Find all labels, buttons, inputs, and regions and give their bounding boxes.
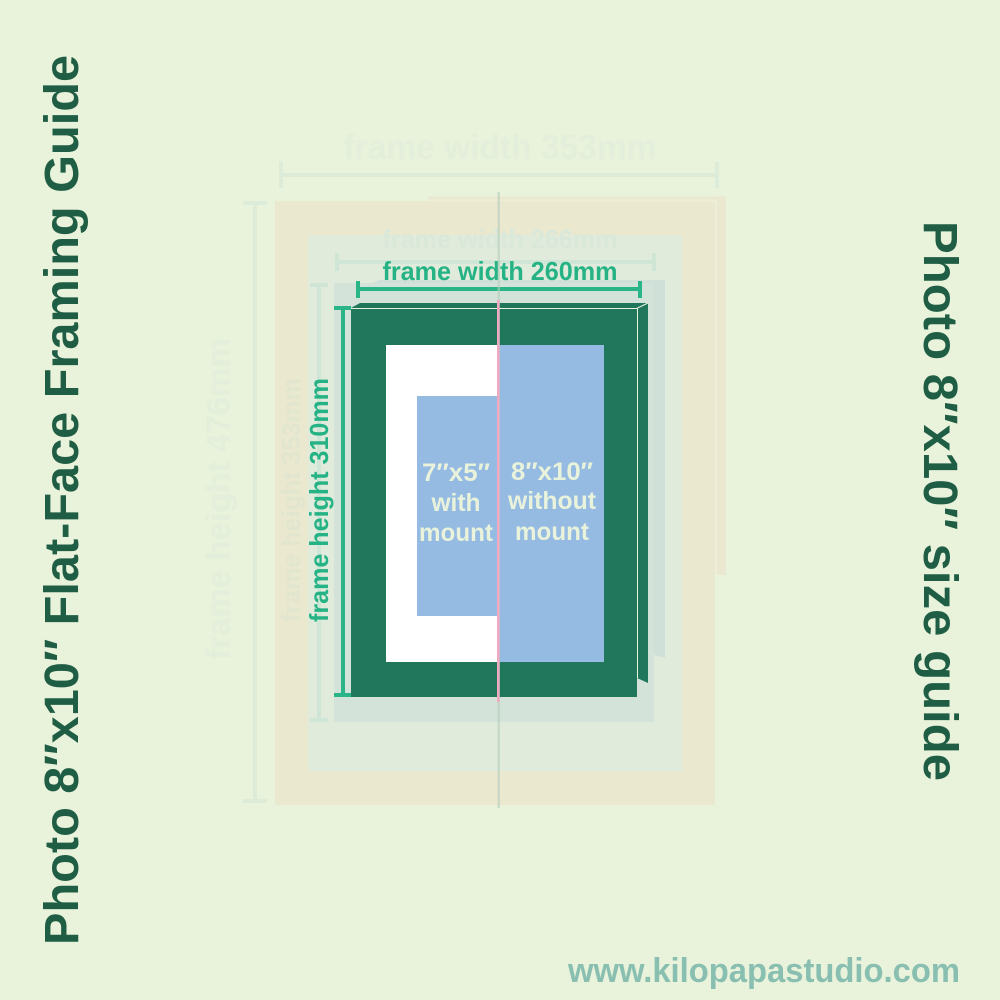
photo 7x5 with mount: mount	[419, 519, 494, 547]
dimension: frame width 266mm	[337, 224, 654, 271]
dimension: frame width 260mm: frame width 260mm	[382, 256, 618, 286]
small frame backing	[334, 280, 665, 722]
photo 7x5 with mount	[417, 396, 498, 616]
centre divider line	[497, 192, 500, 808]
photo 8x10 without mount: 8″x10″	[511, 458, 593, 486]
dimension: frame height 476mm	[200, 203, 267, 801]
dimension: frame width 260mm	[358, 256, 640, 298]
photo 8x10 without mount: mount	[515, 518, 590, 546]
dimension: frame width 353mm	[281, 128, 717, 188]
dimension: frame height 476mm: frame height 476mm	[200, 338, 238, 660]
photo 7x5 with mount: with	[431, 489, 480, 517]
website url: www.kilopapastudio.com	[567, 952, 960, 990]
medium frame 266 x 353	[308, 235, 682, 771]
dimension: frame height 353mm	[276, 285, 328, 720]
dimension: frame height 353mm: frame height 353mm	[276, 378, 306, 622]
large frame 353 x 476	[275, 196, 726, 805]
white mount opening	[386, 345, 498, 662]
title: size guide: Photo 8″x10″ size guide	[913, 221, 966, 781]
dimension: frame height 310mm	[304, 308, 351, 695]
dimension: frame height 310mm: frame height 310mm	[304, 378, 334, 622]
dimension: frame width 353mm: frame width 353mm	[344, 128, 656, 167]
title: flat-face framing guide: Photo 8″x10″ Flat-Face Framing Guide	[36, 55, 89, 945]
main frame	[351, 303, 648, 697]
photo 7x5 with mount: 7″x5″	[422, 459, 490, 487]
photo 8x10 without mount: without	[507, 487, 597, 515]
dimension: frame width 266mm: frame width 266mm	[382, 224, 618, 254]
photo 8x10 without mount	[498, 345, 604, 662]
